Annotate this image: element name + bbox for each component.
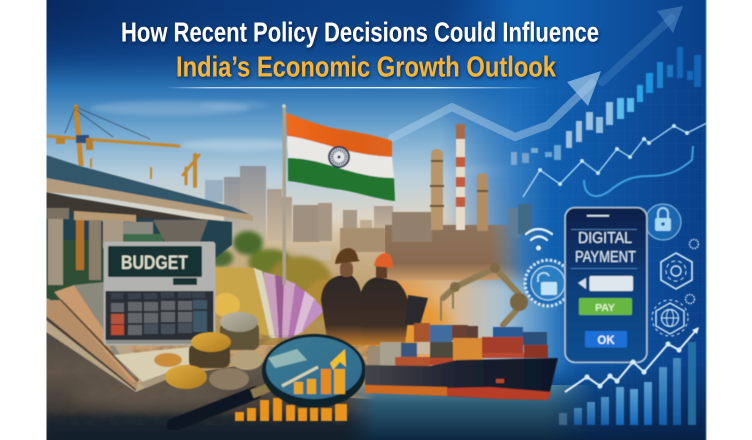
- ok button: [585, 331, 627, 348]
- background: sky and blue gradient: [46, 0, 546, 400]
- line chart: [523, 123, 707, 197]
- worker right: [361, 253, 409, 345]
- phone: digital payment: [565, 208, 647, 362]
- small gear dots: [686, 240, 698, 304]
- silver coin stack: [220, 312, 259, 350]
- hull: [365, 358, 558, 400]
- right edge highlight: [706, 0, 707, 440]
- flag green: [288, 158, 395, 201]
- icon: calculator: [104, 242, 216, 346]
- cargo ship: [365, 263, 558, 400]
- striped chimney: [456, 124, 465, 230]
- columns: [47, 208, 208, 285]
- ok button: OK: [597, 335, 615, 347]
- refinery towers: [430, 124, 532, 238]
- gold coin stack: [189, 332, 231, 368]
- growth arrow: [392, 6, 683, 138]
- title line 1: How Recent Policy Decisions Could Influence: [121, 16, 599, 48]
- workers silhouettes: [321, 248, 428, 345]
- rising line over bars: [565, 327, 699, 392]
- industrial plant base: [385, 212, 525, 280]
- phone heading: PAYMENT: [575, 249, 636, 266]
- phone heading: DIGITAL: [578, 230, 632, 247]
- india flag: [282, 104, 395, 285]
- phone heading: [575, 230, 636, 266]
- flag saffron: [286, 113, 392, 157]
- city skyline: [205, 166, 393, 260]
- sunset glow behind workers: [340, 295, 450, 355]
- deck fascia: [46, 178, 253, 221]
- candlestick chart: [511, 47, 701, 165]
- hexagon settings icon: [661, 253, 692, 289]
- trees: [214, 228, 336, 323]
- containers: [368, 323, 548, 366]
- dark backdrop under deck: [46, 208, 233, 326]
- silver flat coin: [231, 350, 263, 370]
- icon: calculator: BUDGET: [121, 253, 188, 274]
- flag white: [287, 136, 394, 178]
- gear lock icon: [525, 260, 571, 306]
- flagpole: [282, 104, 286, 285]
- ashoka chakra: [329, 147, 349, 167]
- calculator keys: [111, 292, 207, 335]
- cross beam: [74, 211, 136, 222]
- dark flat coin: [209, 368, 249, 390]
- sea: [345, 385, 595, 440]
- wifi icon: [526, 229, 552, 250]
- input field: [578, 276, 633, 291]
- warm city haze: [215, 225, 446, 345]
- blue right-side backdrop: [440, 0, 707, 440]
- pay button: [579, 298, 632, 315]
- hexagon globe icon: [652, 300, 688, 336]
- magnifying glass: [173, 334, 366, 425]
- calculator display: [108, 246, 202, 277]
- ship crane arm: [441, 263, 528, 325]
- deck railing: [46, 155, 253, 216]
- bar chart lower right: [559, 342, 696, 425]
- title underline: [165, 87, 540, 88]
- money notes stack left: [46, 282, 195, 392]
- overpass bridge: [46, 155, 253, 345]
- ground: [46, 325, 386, 440]
- top lock icon: [645, 204, 681, 240]
- pay button: PAY: [595, 302, 615, 314]
- coin stacks: [165, 312, 263, 390]
- scene behind cargo ship: [385, 278, 575, 373]
- worker left: [321, 248, 362, 345]
- bars beneath lens: [235, 398, 347, 421]
- title line 2: India’s Economic Growth Outlook: [176, 52, 557, 84]
- construction cranes: [47, 107, 199, 186]
- title block: [121, 16, 599, 84]
- gold flat coin: [165, 365, 207, 389]
- rupee notes fan right: [208, 267, 325, 338]
